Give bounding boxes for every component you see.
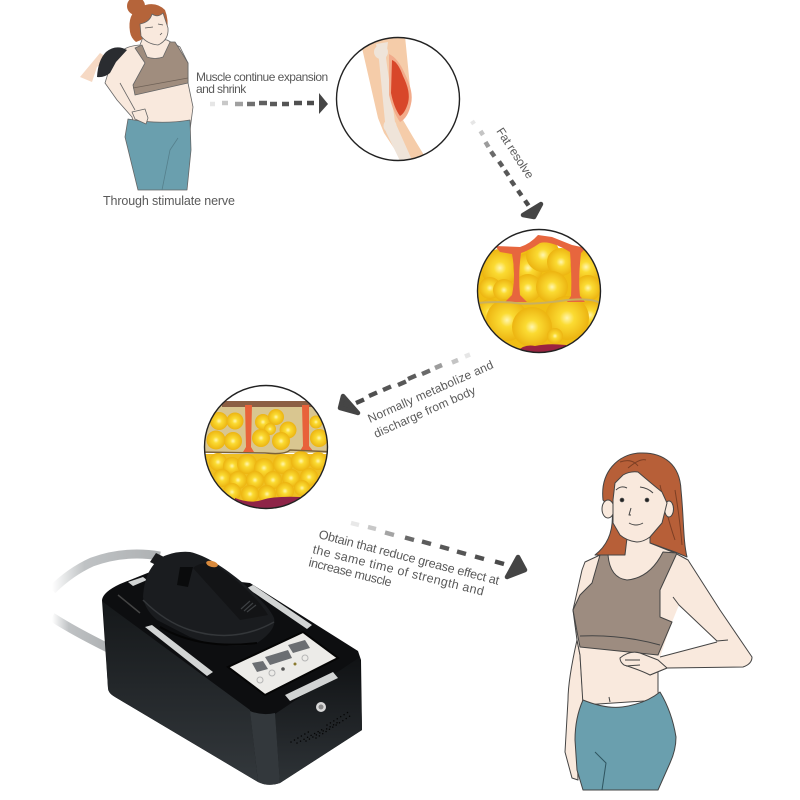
speaker holes: [291, 711, 350, 743]
label: obtain result text: the same time of strength and: [311, 542, 485, 599]
tan divider: [478, 299, 600, 304]
control panel: [228, 632, 338, 695]
grip recess: [177, 567, 193, 587]
illustration: overweight woman using massager: [80, 0, 193, 190]
device: EMS body sculpting machine: [52, 552, 362, 785]
crop top: [133, 42, 188, 95]
label: discharge from body: discharge from body: [372, 383, 478, 441]
label: fat resolve: Fat resolve: [493, 125, 537, 182]
hand on hip: [132, 109, 148, 124]
crop top: [573, 552, 677, 655]
arrow: to muscle: [210, 93, 328, 114]
top surface strips: [128, 577, 338, 701]
body skin: [573, 536, 752, 705]
circle: muscle close-up: [336, 36, 460, 165]
handpiece shell: [143, 552, 274, 646]
handle slope: [193, 563, 268, 620]
hair strands: [620, 460, 682, 545]
maroon base: [235, 496, 300, 508]
label: muscle continue expansion: and shrink: [196, 82, 247, 96]
circle: fat cells before: [475, 230, 605, 360]
divider membrane: [200, 450, 335, 454]
hand holding massager: [80, 53, 108, 82]
facial features: [145, 24, 163, 35]
maroon base: [520, 344, 566, 352]
arm bones: [376, 42, 412, 165]
hair bun and hair: [127, 0, 145, 15]
arrow: discharge: [340, 354, 470, 413]
digital displays: [252, 640, 310, 672]
tan cells: [200, 405, 335, 453]
eyes and mouth: [616, 487, 653, 525]
white gap between arm and torso: [660, 605, 717, 657]
red tissue band and pillars: [495, 235, 586, 302]
vent: [241, 601, 256, 612]
machine cables: [52, 554, 160, 590]
brown membrane: [222, 401, 314, 407]
long hair: [595, 453, 687, 557]
handpiece connector: [150, 553, 164, 566]
face: [140, 13, 168, 45]
right side face: [275, 657, 362, 783]
face: [613, 472, 667, 542]
machine base: [102, 572, 362, 785]
arm lines: [660, 597, 728, 657]
muscle: [389, 54, 412, 122]
leggings: [575, 692, 676, 790]
handpiece: [143, 552, 274, 646]
label: obtain result text: Obtain that reduce grease effect at: [317, 527, 501, 588]
massager head: [97, 47, 127, 77]
orange indicator: [205, 560, 219, 568]
upper fat balls: [206, 409, 328, 450]
ears: [602, 500, 614, 518]
body skin: [105, 37, 193, 130]
left arm: [565, 640, 583, 780]
front corner: [250, 711, 280, 785]
lower lip: [143, 600, 274, 635]
label: obtain result text: increase muscle: [307, 555, 393, 589]
arm skin: [362, 38, 424, 158]
circle: fat cells after: [200, 386, 335, 512]
lower fat layer: [206, 451, 326, 504]
leggings: [125, 119, 191, 190]
red pillars: [243, 405, 313, 452]
power button: [316, 702, 326, 712]
label: through stimulate nerve: Through stimulate nerve: [103, 194, 235, 208]
illustration: slim woman: [565, 453, 752, 790]
arrow: fat resolve: [472, 121, 541, 217]
arm inner line: [120, 83, 135, 110]
yellow fat balls: [478, 242, 600, 352]
panel buttons: [257, 655, 308, 683]
arrow: result: [351, 523, 525, 577]
left side face: [103, 602, 258, 782]
label: normally metabolize: Normally metabolize and: [366, 358, 495, 426]
fingers: [620, 652, 667, 675]
label: muscle continue expansion: Muscle continue expansion: [196, 70, 328, 84]
